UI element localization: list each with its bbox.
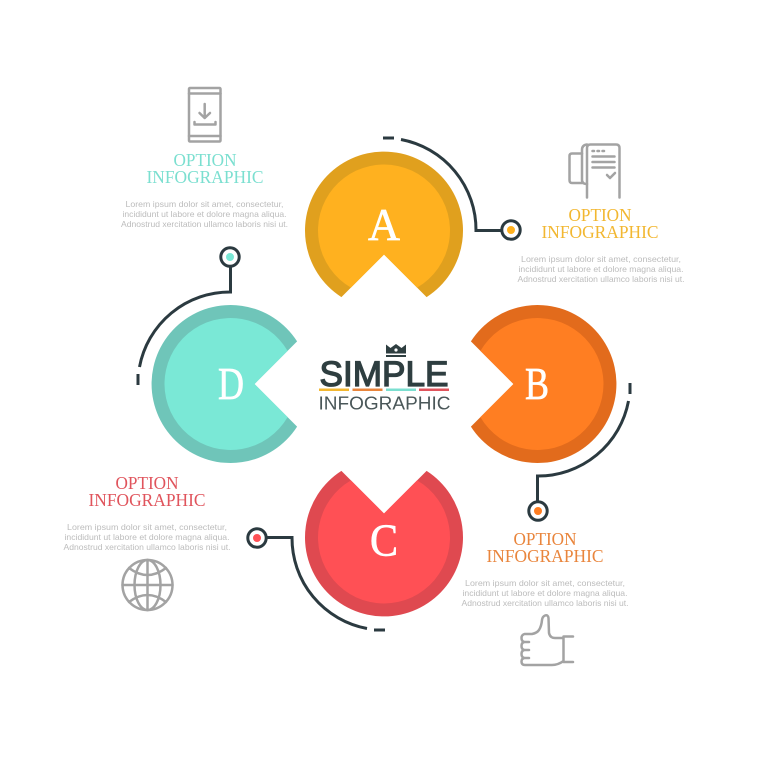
panel: option B — [462, 305, 630, 665]
panel: option A — [305, 138, 684, 297]
center logo — [318, 344, 450, 414]
letter D: D — [218, 359, 244, 409]
description D: incididunt ut labore et dolore magna aliqua. — [122, 209, 286, 219]
heading C — [88, 473, 206, 510]
connector B — [529, 383, 630, 520]
description A — [518, 254, 684, 284]
description B: incididunt ut labore et dolore magna aliqua. — [462, 588, 628, 598]
icon: phone download — [189, 88, 220, 142]
heading B: INFOGRAPHIC — [486, 546, 604, 566]
connector A — [383, 138, 520, 239]
logo word SIMPLE: SIMPLE — [320, 355, 448, 394]
description D: Lorem ipsum dolor sit amet, consectetur, — [126, 199, 284, 209]
letter B: B — [525, 359, 549, 409]
pie segment B — [471, 305, 616, 463]
description C: Adnostrud xercitation ullamco laboris nisi ut. — [64, 542, 230, 552]
description A: Adnostrud xercitation ullamco laboris nisi ut. — [518, 274, 684, 284]
icon: thumbs up — [522, 615, 573, 665]
heading D: OPTION — [174, 150, 236, 170]
heading A: INFOGRAPHIC — [542, 222, 658, 242]
logo word INFOGRAPHIC: INFOGRAPHIC — [318, 394, 450, 414]
panel: option D — [121, 88, 297, 463]
letter A: A — [368, 200, 400, 250]
pie segment D — [152, 305, 297, 463]
colour bars — [319, 388, 449, 391]
connector C — [248, 529, 385, 630]
description A: incididunt ut labore et dolore magna aliqua. — [518, 264, 684, 274]
letter C: C — [370, 516, 398, 566]
heading A — [542, 205, 658, 242]
heading B — [486, 529, 604, 566]
heading D: INFOGRAPHIC — [146, 167, 264, 187]
panel: option C — [64, 471, 463, 630]
heading B: OPTION — [514, 529, 576, 549]
icon: globe — [122, 560, 172, 610]
description B: Lorem ipsum dolor sit amet, consectetur, — [465, 578, 625, 588]
description C: Lorem ipsum dolor sit amet, consectetur, — [67, 522, 227, 532]
description A: Lorem ipsum dolor sit amet, consectetur, — [521, 254, 681, 264]
description C: incididunt ut labore et dolore magna aliqua. — [64, 532, 230, 542]
description D: Adnostrud xercitation ullamco laboris nisi ut. — [121, 219, 288, 229]
icon: document in hand — [570, 144, 620, 198]
heading C: INFOGRAPHIC — [88, 490, 206, 510]
heading C: OPTION — [116, 473, 178, 493]
connector D — [138, 248, 239, 385]
pie segment A — [305, 152, 463, 297]
pie segment C — [305, 471, 463, 616]
description D — [121, 199, 288, 229]
description B: Adnostrud xercitation ullamco laboris nisi ut. — [462, 598, 628, 608]
description C — [64, 522, 230, 552]
description B — [462, 578, 628, 608]
heading A: OPTION — [568, 205, 632, 225]
crown icon — [386, 344, 406, 357]
heading D — [146, 150, 264, 187]
